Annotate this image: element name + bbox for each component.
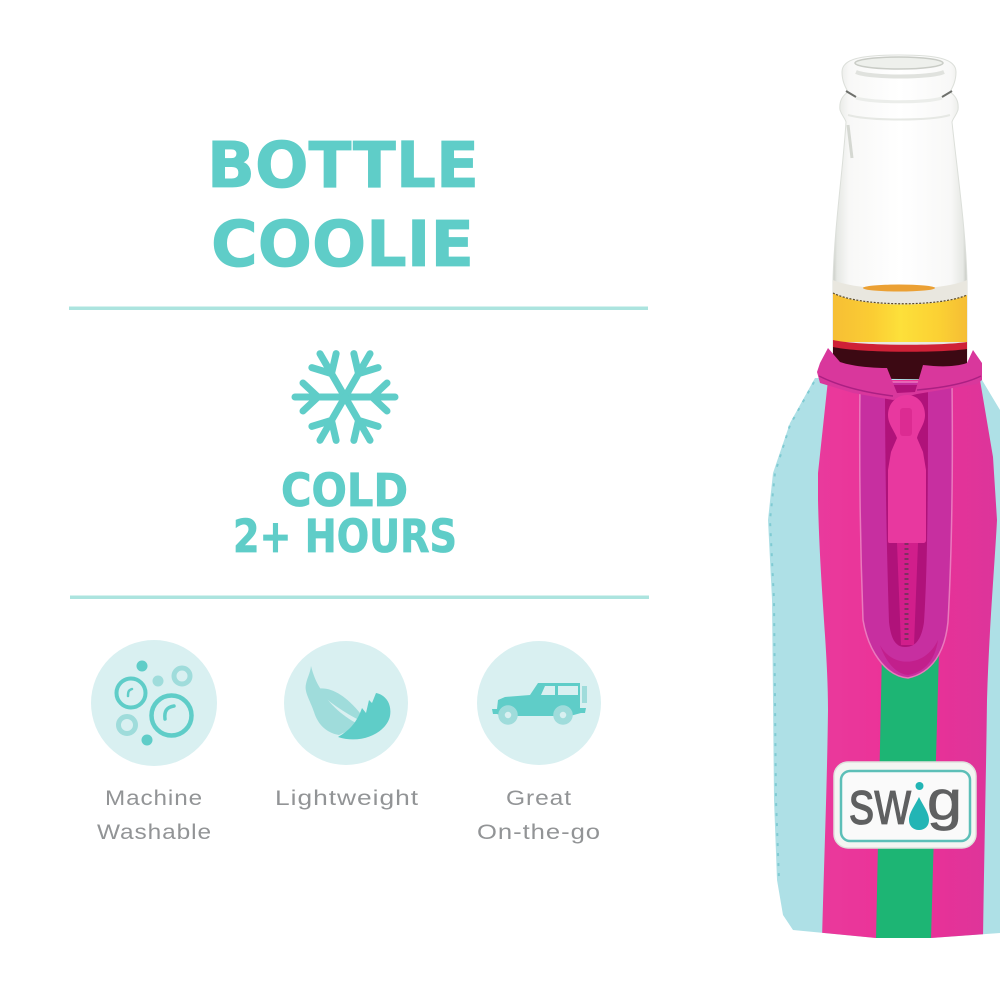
swig badge: sw xyxy=(849,769,911,838)
feature: lightweight: Lightweight xyxy=(275,786,419,810)
title: BOTTLE xyxy=(207,129,479,202)
feature: machine washable: Washable xyxy=(97,820,212,844)
feature: lightweight xyxy=(275,641,419,810)
zipper pull xyxy=(888,395,926,543)
feature: great on-the-go: On-the-go xyxy=(477,820,601,844)
zipper flap xyxy=(860,382,952,678)
beer xyxy=(833,280,967,366)
collar xyxy=(817,348,982,400)
icon: snowflake xyxy=(295,347,395,447)
cold duration text: 2+ HOURS xyxy=(233,510,457,563)
swig badge: g xyxy=(927,769,962,831)
coolie body xyxy=(760,348,1000,940)
feature: machine washable xyxy=(91,640,217,844)
title xyxy=(207,129,479,281)
cold duration text xyxy=(233,464,457,563)
bottle glass neck xyxy=(833,55,967,398)
feature: great on-the-go: Great xyxy=(506,786,572,810)
feature: great on-the-go xyxy=(477,641,601,844)
swig badge xyxy=(834,762,976,848)
title: COOLIE xyxy=(211,208,474,281)
coolie stitching xyxy=(770,382,814,880)
feature: machine washable: Machine xyxy=(105,786,203,810)
cold duration text: COLD xyxy=(281,464,408,517)
